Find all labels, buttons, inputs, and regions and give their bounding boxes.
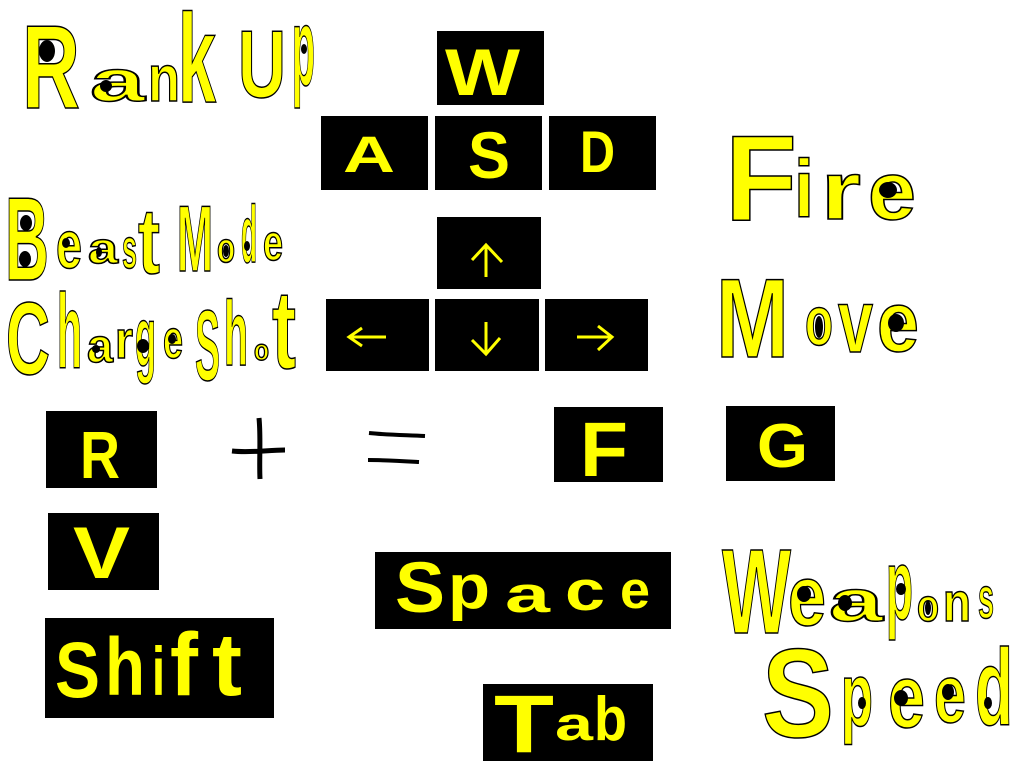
label: Beast Mode: B [5,173,49,306]
key: Shift: f [170,614,198,714]
label: Rank Up: U [238,11,286,118]
label: Fire: r [821,144,861,237]
key: R [46,411,157,493]
key: Shift: t [212,614,242,714]
key: W: W [445,35,521,109]
label: Beast Mode: s [122,217,137,281]
key: Space: p [448,553,490,622]
key: left arrow [326,299,429,371]
key: G [726,406,835,481]
label: Weapons: p [886,529,913,641]
label: Beast Mode: d [241,190,257,280]
equals sign [368,433,425,462]
key: right arrow [545,299,648,371]
label: Charge Shot: e [163,308,183,370]
label: Speed: e [888,646,925,746]
label: Beast Mode: e [56,207,82,283]
key: Shift: S [55,625,100,714]
label: Weapons: o [917,580,939,631]
label: Beast Mode [5,173,283,306]
key: D: D [580,120,615,185]
key: Tab: b [594,685,627,754]
key: Space: a [505,566,551,623]
label: Weapons [722,523,994,659]
label: Speed: e [934,647,966,740]
key: S [435,116,542,192]
label: Move: v [838,272,873,372]
label: Speed: p [841,646,873,746]
label: Beast Mode: M [177,186,213,291]
key: V: V [73,513,130,594]
label: Move: e [877,275,919,370]
label: Beast Mode: o [217,224,235,271]
label: Charge Shot: S [195,290,220,402]
key: down arrow [435,299,539,371]
key: F [554,407,663,493]
key: A [321,116,428,190]
key: up arrow [437,217,541,289]
label: Charge Shot: r [115,311,133,370]
label: Weapons: W [722,523,791,659]
key: Shift: h [105,622,145,713]
label: Beast Mode: a [88,224,119,273]
key: Space: c [565,559,605,623]
label: Charge Shot: t [272,268,296,392]
label: Charge Shot: h [224,283,248,385]
label: Fire: F [725,110,797,246]
key: Space [375,549,671,629]
key: A: A [343,126,395,183]
key: W [437,31,544,109]
label: Weapons: a [829,569,884,634]
label: Rank Up: R [22,1,80,134]
key: Space: e [620,561,650,620]
label: Speed [762,623,1013,764]
label: Speed: S [762,623,834,764]
key: S: S [468,118,510,192]
label: Weapons: n [943,571,971,633]
label: Charge Shot: h [57,273,82,391]
label: Fire: e [868,144,916,237]
key: G: G [757,412,808,481]
label: Fire [725,110,916,246]
key: D [549,116,656,190]
plus sign [232,418,285,479]
label: Beast Mode: t [138,189,160,293]
key: Tab: a [555,697,594,750]
label: Charge Shot [6,268,296,402]
label: Fire: i [794,144,814,235]
key: F: F [580,407,628,493]
label: Move: M [716,256,789,381]
key: Space: S [395,549,445,628]
label: Beast Mode: e [263,214,283,271]
key: Tab: T [494,679,554,768]
label: Move [716,256,919,381]
label: Rank Up: a [90,49,146,114]
key: Shift [45,614,274,718]
label: Charge Shot: a [87,319,114,372]
label: Charge Shot: g [135,290,156,384]
key: V [48,513,159,594]
key: Tab [483,679,653,768]
text: s [978,566,994,631]
key: R: R [80,418,120,493]
label: Move: o [805,282,833,360]
label: Rank Up: n [148,41,180,115]
label: Charge Shot: C [6,281,50,396]
label: Weapons: e [788,549,826,644]
label: Rank Up [22,0,315,134]
key: Shift: i [152,633,165,710]
label: Charge Shot: o [254,334,269,367]
